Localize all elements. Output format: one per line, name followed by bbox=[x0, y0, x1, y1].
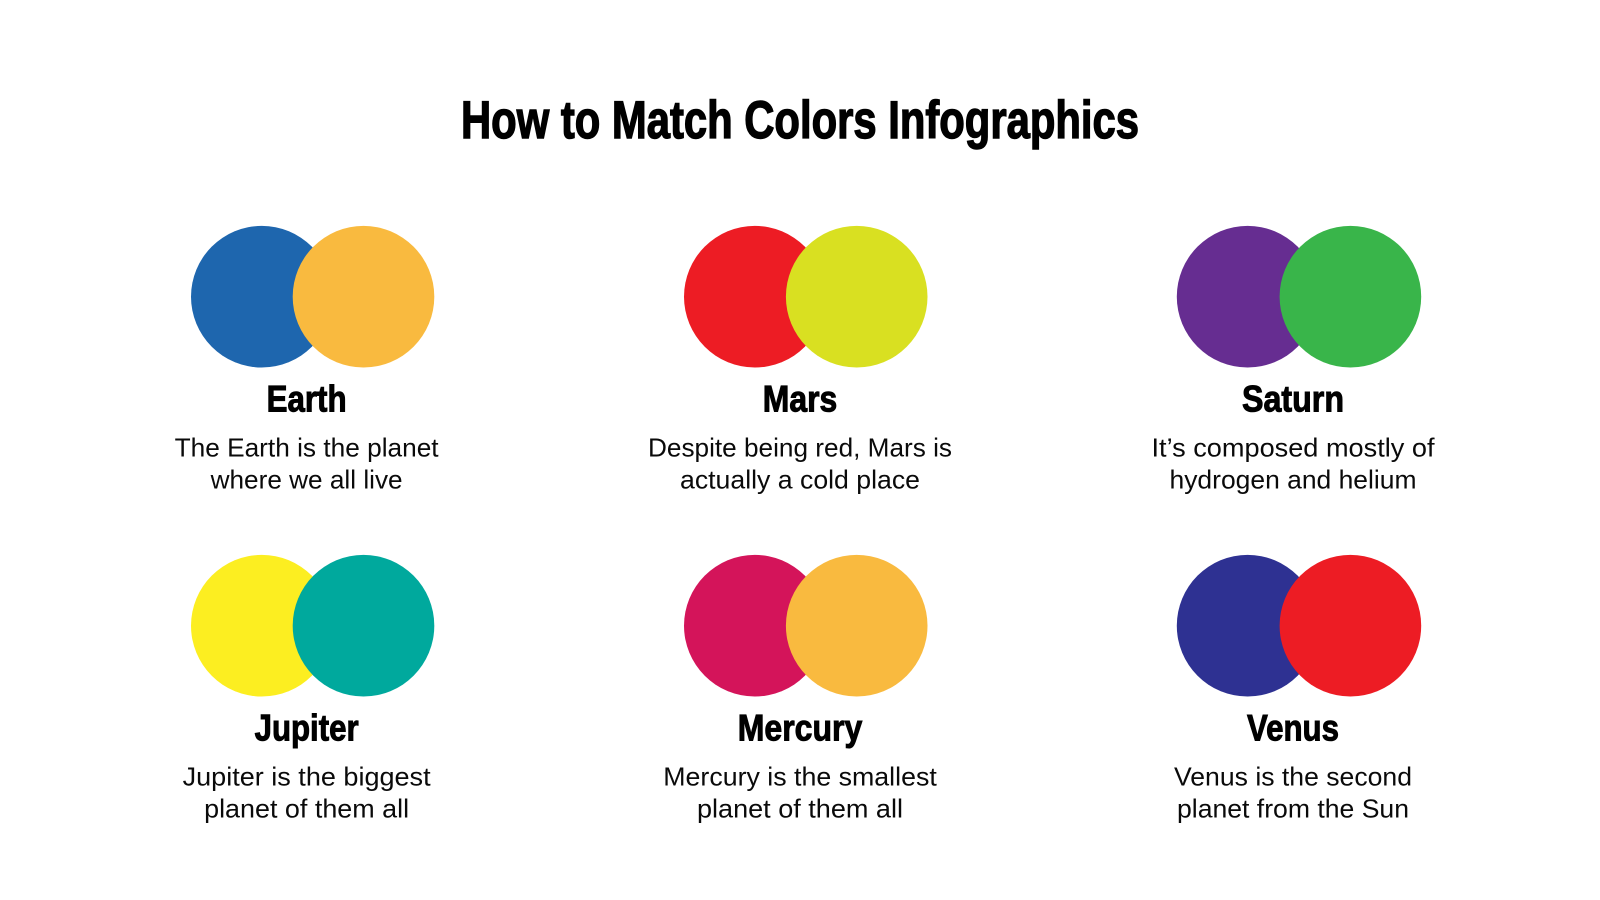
description: Saturn: It’s composed mostly of bbox=[1152, 433, 1435, 463]
icon: crimson and orange circles bbox=[684, 555, 928, 696]
heading: Venus: Venus bbox=[1247, 708, 1339, 748]
description: Jupiter: Jupiter is the biggest bbox=[183, 762, 431, 792]
panel: Mercury bbox=[663, 555, 938, 823]
description: Mars bbox=[648, 433, 952, 494]
panel: Earth bbox=[175, 226, 439, 494]
heading: Mars: Mars bbox=[763, 378, 837, 420]
description: Venus: planet from the Sun bbox=[1177, 793, 1409, 823]
heading: Saturn: Saturn bbox=[1242, 378, 1344, 420]
description: Mercury: Mercury is the smallest bbox=[663, 762, 938, 792]
panel: Jupiter bbox=[183, 555, 434, 823]
description: Venus bbox=[1174, 762, 1412, 823]
icon: blue and orange circles bbox=[191, 226, 434, 368]
description: Earth: The Earth is the planet bbox=[175, 433, 439, 463]
description: Earth bbox=[175, 433, 439, 494]
description: Mercury: planet of them all bbox=[697, 793, 903, 823]
description: Mercury bbox=[663, 762, 938, 823]
heading: Earth: Earth bbox=[267, 378, 347, 420]
panel: Mars bbox=[648, 226, 952, 494]
description: Jupiter: planet of them all bbox=[204, 793, 409, 823]
description: Earth: where we all live bbox=[210, 464, 403, 494]
icon: red and lime circles bbox=[684, 226, 928, 368]
panel: Saturn bbox=[1152, 226, 1435, 494]
icon: purple and green circles bbox=[1177, 226, 1421, 368]
description: Saturn: hydrogen and helium bbox=[1170, 464, 1416, 494]
description: Mars: actually a cold place bbox=[680, 464, 920, 494]
heading: Mercury: Mercury bbox=[738, 708, 863, 748]
icon: navy and red circles bbox=[1177, 555, 1421, 696]
description: Mars: Despite being red, Mars is bbox=[648, 433, 952, 463]
description: Venus: Venus is the second bbox=[1174, 762, 1412, 792]
heading: Jupiter: Jupiter bbox=[255, 708, 359, 748]
title: How to Match Colors Infographics bbox=[461, 91, 1139, 150]
description: Jupiter bbox=[183, 762, 431, 823]
description: Saturn bbox=[1152, 433, 1435, 494]
panel: Venus bbox=[1174, 555, 1421, 823]
icon: yellow and teal circles bbox=[191, 555, 434, 696]
